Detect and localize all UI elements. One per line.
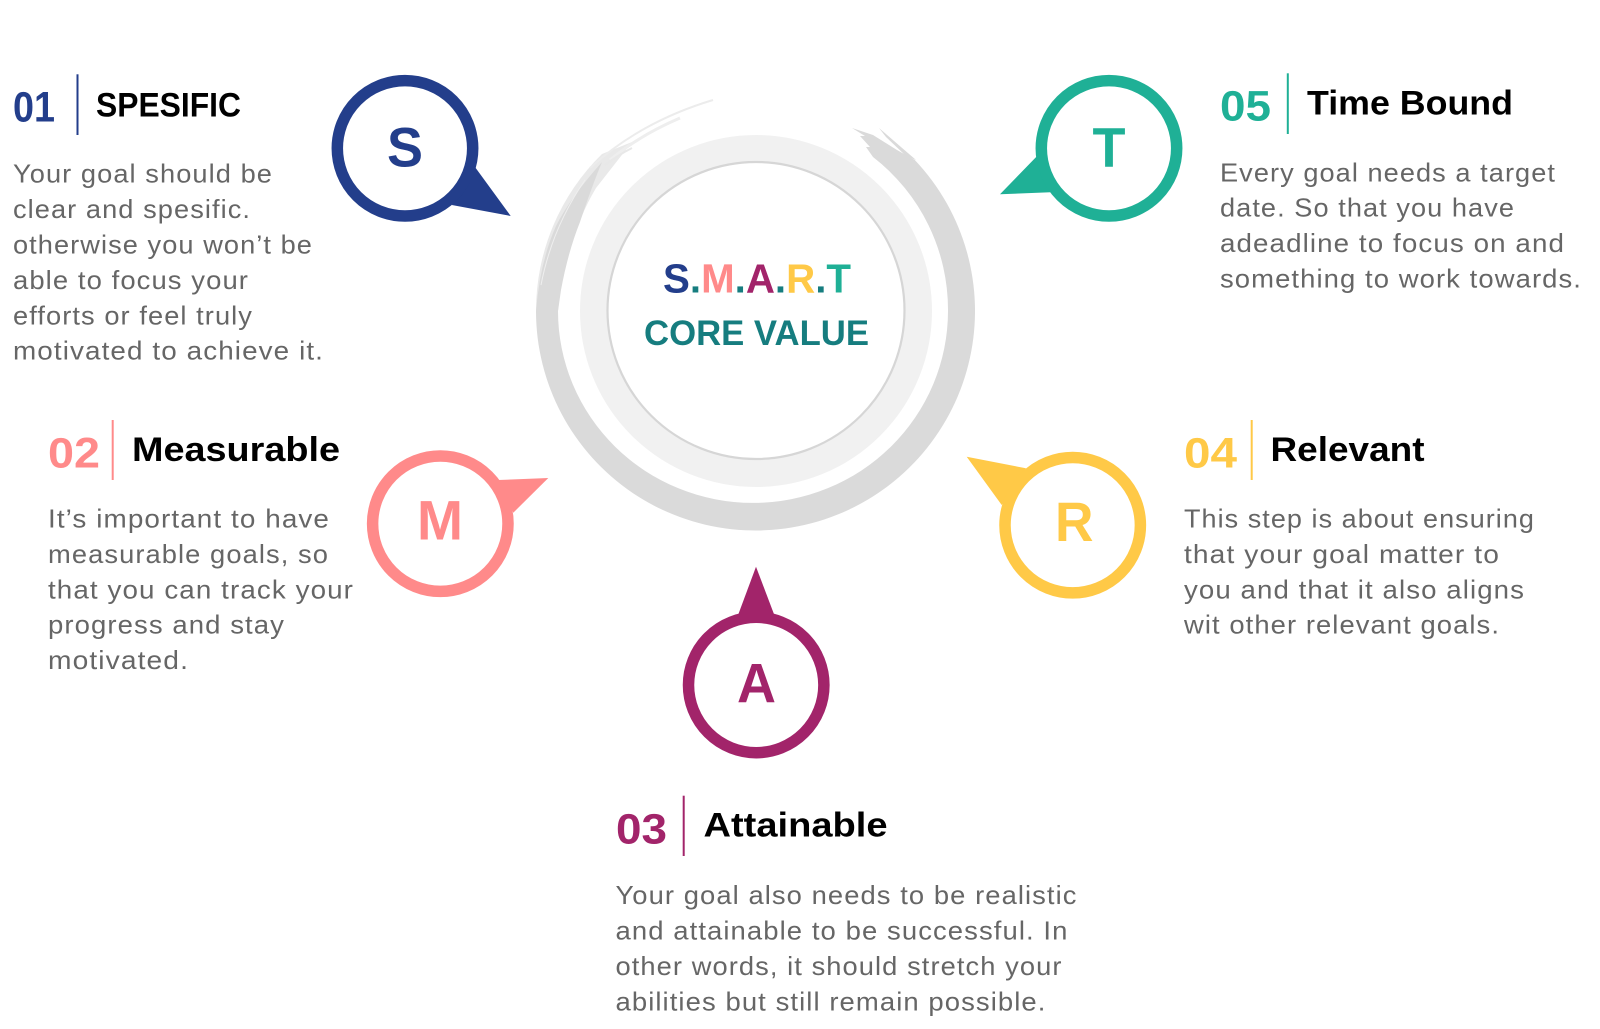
- text Relevant: [1183, 506, 1535, 640]
- marker M: M: [417, 488, 463, 551]
- marker S: S: [387, 116, 423, 178]
- text Spesific: [13, 161, 324, 366]
- light inner ring: [594, 148, 918, 474]
- text Attainable: other words, it should stretch your: [616, 953, 1062, 981]
- text Spesific: Your goal should be: [13, 161, 273, 189]
- marker A: A: [737, 652, 776, 715]
- center subtitle: CORE VALUE: [644, 314, 869, 353]
- text Spesific: able to focus your: [13, 267, 249, 295]
- text Attainable: abilities but still remain possible.: [616, 988, 1046, 1016]
- text Attainable: [616, 882, 1078, 1016]
- marker T: [1000, 81, 1177, 216]
- number 05: 05: [1220, 83, 1271, 131]
- text Relevant: wit other relevant goals.: [1183, 612, 1500, 640]
- text Spesific: otherwise you won’t be: [13, 232, 313, 260]
- text Measurable: It’s important to have: [48, 506, 330, 534]
- block 01 Spesific: [13, 74, 324, 366]
- block 03 Attainable: [616, 796, 1078, 1016]
- text Attainable: and attainable to be successful. In: [616, 918, 1068, 946]
- marker A: [688, 567, 824, 753]
- text Spesific: efforts or feel truly: [13, 302, 253, 330]
- number 01: 01: [13, 84, 55, 132]
- text Measurable: progress and stay: [48, 612, 285, 640]
- text Attainable: Your goal also needs to be realistic: [616, 882, 1078, 910]
- text Time Bound: [1220, 159, 1582, 293]
- text Time Bound: Every goal needs a target: [1220, 159, 1556, 187]
- block 05 Time Bound: [1220, 73, 1582, 293]
- marker M: [373, 456, 548, 591]
- text Measurable: [48, 506, 354, 675]
- text Time Bound: something to work towards.: [1220, 265, 1582, 293]
- marker T: T: [1092, 116, 1126, 179]
- heading Spesific: SPESIFIC: [96, 86, 241, 124]
- center title: S.M.A.R.T: [663, 256, 851, 302]
- text Relevant: that your goal matter to: [1184, 541, 1500, 569]
- text Relevant: you and that it also aligns: [1184, 576, 1525, 604]
- block 04 Relevant: [1183, 420, 1535, 640]
- marker R: R: [1055, 490, 1094, 553]
- heading Attainable: Attainable: [704, 806, 888, 844]
- number 02: 02: [48, 430, 100, 478]
- number 03: 03: [616, 805, 667, 853]
- number 04: 04: [1184, 430, 1237, 478]
- text Spesific: motivated to achieve it.: [13, 338, 324, 366]
- text Measurable: measurable goals, so: [48, 541, 329, 569]
- inner circle outline: [608, 162, 904, 459]
- text Spesific: clear and spesific.: [13, 196, 251, 224]
- text Time Bound: date. So that you have: [1220, 195, 1515, 223]
- brush stroke ring: [536, 100, 975, 531]
- text Relevant: This step is about ensuring: [1184, 506, 1535, 534]
- text Measurable: motivated.: [48, 647, 189, 675]
- heading Measurable: Measurable: [132, 431, 340, 469]
- marker R: [967, 457, 1140, 593]
- text Measurable: that you can track your: [48, 576, 354, 604]
- heading Time Bound: Time Bound: [1307, 85, 1513, 123]
- heading Relevant: Relevant: [1270, 431, 1424, 469]
- marker S: [337, 81, 511, 216]
- block 02 Measurable: [48, 420, 354, 675]
- text Time Bound: adeadline to focus on and: [1220, 230, 1565, 258]
- central circle: brush ring and core value: [536, 100, 975, 531]
